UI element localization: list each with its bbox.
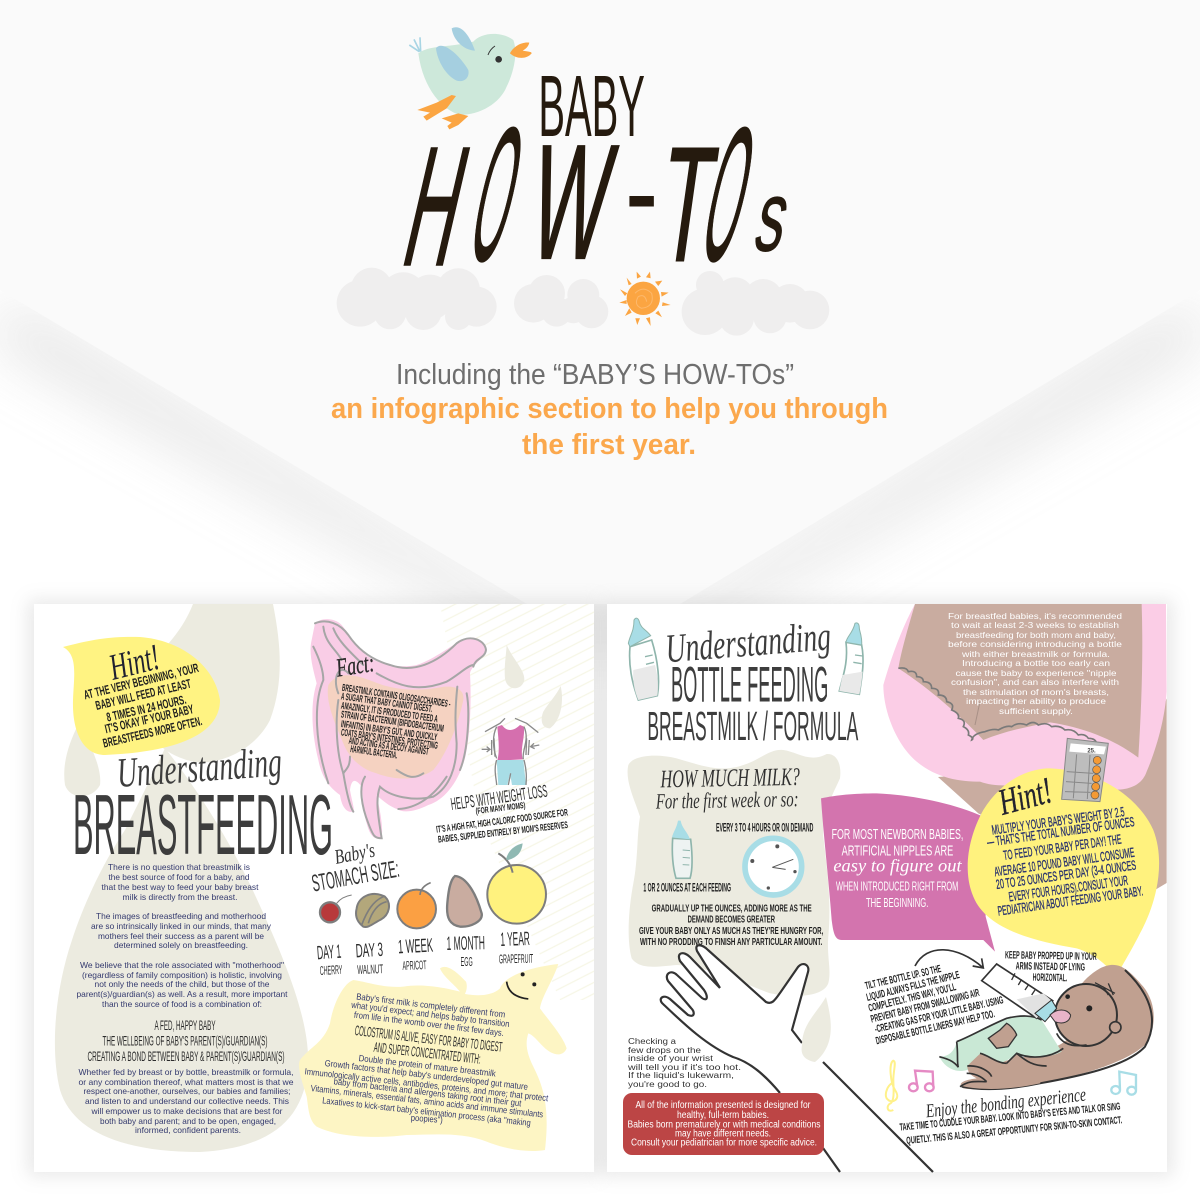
text block: checking a few drops: Checking a [628, 1037, 677, 1046]
text block: keep baby propped: KEEP BABY PROPPED UP IN YOUR [1005, 949, 1097, 963]
text block: breastfeeding intro: determined solely on breastfeeding. [114, 940, 248, 950]
heading: stomach size [310, 840, 401, 898]
text block: breastfeeding intro: mothers feel their success as a parent will be [98, 931, 264, 941]
heading: stomach size: Baby's [333, 840, 377, 869]
callout: colostrum blob: from life in the womb over the first few days. [353, 1010, 504, 1038]
text block: breastfed babies advice: impacting her ability to produce [966, 697, 1107, 706]
text block: helps with weight loss: IT'S A HIGH FAT, HIGH CALORIC FOOD SOURCE FOR [436, 807, 569, 836]
icon: egg [447, 876, 482, 927]
title: T [650, 112, 726, 295]
title: H [390, 112, 484, 301]
heading: understanding breastfeeding [73, 740, 333, 873]
illustration: colon with fact: STRAIN OF BACTERIUM (BIFIDOBACTERIUM [340, 709, 444, 735]
title: O [456, 88, 540, 300]
illustration: feeding baby [939, 964, 1154, 1090]
icon: apricot [397, 883, 436, 928]
icon: grapefruit [487, 843, 546, 924]
title: BABY [538, 57, 645, 155]
callout: right hint bubble [968, 768, 1159, 980]
callout: colostrum blob [299, 964, 567, 1151]
panel: understanding bottle feeding: BREASTMILK / FORMULA [647, 703, 859, 749]
illustration: colon with fact: Fact: [333, 648, 376, 683]
panel: understanding bottle feeding [607, 604, 1167, 1172]
icon: milk drops [505, 645, 562, 728]
illustration: clouds [337, 268, 829, 336]
callout: left hint bubble [63, 637, 220, 755]
icon: walnut [356, 894, 389, 927]
labels: stomach stages: 1 WEEK [397, 936, 434, 958]
callout: left hint bubble: 8 TIMES IN 24 HOURS. [105, 693, 188, 725]
text block: breastfeeding closing: and listen to and understand our collective needs. This [85, 1096, 289, 1106]
illustration: colon with fact [311, 619, 486, 839]
illustration: colon with fact: A SUGAR THAT BABY CANNOT DIGEST. [340, 691, 433, 715]
illustration: colon with fact: COATS BABY'S INTESTINES, PROTECTING [340, 727, 439, 752]
callout: artificial nipples: FOR MOST NEWBORN BABIES, [832, 827, 963, 843]
panel: understanding bottle feeding: BOTTLE FEEDING [671, 657, 828, 713]
text block: breastfed babies advice: cause the baby to experience "nipple [956, 669, 1117, 678]
text block: checking a few drops: you're good to go. [628, 1080, 707, 1089]
text block: breastfeeding intro: are so intrinsically linked in our minds, that many [91, 921, 272, 931]
illustration: hand and wrist [661, 945, 935, 1172]
text block: breastfeeding closing: both baby and parent; and to be open, engaged, [100, 1116, 276, 1126]
callout: left hint bubble: BREASTFEEDS MORE OFTEN. [102, 714, 203, 751]
labels: stomach stages: 1 MONTH [446, 933, 485, 955]
text block: breastfed babies advice: the stimulation of mom's breasts, [963, 688, 1109, 697]
text block: breastfed babies advice: with either breastmilk or formula. [961, 650, 1110, 659]
text block: tilt the bottle: -CREATING GAS FOR YOUR LITTLE BABY. USING [874, 994, 1005, 1036]
text block: breastfeeding intro: the best source of food for a baby, and [108, 872, 250, 882]
text block: helps with weight loss: HELPS WITH WEIGHT LOSS [449, 781, 549, 814]
callout: artificial nipples [821, 793, 995, 952]
text block: helps with weight loss: (FOR MANY MOMS) [475, 800, 526, 816]
panel: how much milk: DEMAND BECOMES GREATER [688, 915, 775, 926]
icon: treble clef [886, 1061, 897, 1111]
illustration: breast and body [883, 604, 1167, 895]
heading: understanding breastfeeding: Understanding [115, 740, 283, 797]
panel: how much milk: EVERY 3 TO 4 HOURS OR ON DEMAND [716, 821, 813, 835]
chart: baby's stomach size: GRAPEFRUIT [499, 952, 533, 966]
chart: baby's stomach size: 1 YEAR [500, 929, 530, 951]
text block: breastfed babies advice: For breastfed babies, it's recommended [948, 612, 1122, 621]
callout: medical disclaimer [623, 1093, 824, 1155]
text block: breastfeeding intro: We believe that the role associated with "motherhood" [80, 960, 284, 970]
heading: understanding bottle feeding [647, 613, 859, 749]
text block: checking a few drops: inside of your wrist [628, 1054, 714, 1063]
chart: baby's stomach size [310, 840, 546, 978]
text block: tilt the bottle: PREVENT BABY FROM SWALLOWING AIR [869, 987, 981, 1026]
labels: stomach stages: DAY 3 [355, 940, 384, 962]
text block: tilt the bottle [864, 963, 1005, 1047]
icon: sun [619, 272, 671, 326]
illustration: colon with fact: AMAZINGLY, IT IS PRODUCED TO FEED A [340, 701, 438, 725]
subtitle: an infographic section to help you through [331, 393, 888, 425]
callout: colostrum blob: Growth factors that help baby's underdeveloped gut mature [324, 1058, 529, 1092]
callout: colostrum blob: Double the protein of mature breastmilk [358, 1053, 497, 1079]
panel: how much milk: HOW MUCH MILK? [660, 763, 800, 793]
text block: breastfed babies advice: Introducing a bottle too early can [962, 659, 1110, 668]
panel: understanding breastfeeding [34, 604, 594, 1172]
callout: left hint bubble: BABY WILL FEED AT LEAST [94, 677, 193, 713]
callout: medical disclaimer: Consult your pediatrician for more specific advice. [631, 1138, 817, 1148]
text block: tilt the bottle: DISPOSABLE BOTTLE LINERS MAY HELP TOO. [875, 1008, 996, 1047]
text block: breastfed babies advice: breastfeeding for both mom and baby, [956, 631, 1116, 640]
labels: stomach stages: DAY 1 [316, 942, 342, 964]
text block: breastfeeding intro: that the best way to feed your baby breast [102, 882, 259, 892]
text block: breastfeeding closing: respect one-another, ourselves, our babies and families; [84, 1086, 290, 1096]
icon: baby bottle right [839, 623, 863, 694]
illustration: colon with fact: HARMFUL BACTERIA. [350, 744, 398, 762]
text block: breastfed babies advice: before considering introducing a bottle [948, 640, 1123, 649]
text block: keep baby propped: ARMS INSTEAD OF LYING [1016, 960, 1085, 974]
icon: blue music notes [1111, 1072, 1136, 1095]
callout: left hint bubble: Hint! [105, 637, 164, 689]
icon: calculator [1062, 738, 1108, 802]
callout: medical disclaimer: healthy, full-term babies. [677, 1110, 769, 1121]
icon: clock [745, 838, 802, 895]
icon: pink music notes [909, 1071, 934, 1091]
illustration: colon with fact: BREASTMILK CONTAINS OLIGOSACCHARIDES - [341, 683, 451, 710]
text block: breastfeeding intro: There is no question that breastmilk is [108, 862, 250, 872]
title: W [519, 110, 625, 293]
heading: understanding bottle feeding: Understanding [664, 613, 833, 671]
icon: woman waist [482, 718, 539, 785]
text block: breastfeeding intro: (regardless of family composition) is holistic, involving [82, 970, 282, 980]
subtitle [331, 359, 888, 461]
text block: breastfeeding closing: or any combination thereof, what matters most is that we [78, 1077, 294, 1087]
text block: checking a few drops: few drops on the [628, 1046, 702, 1055]
icon: baby bottle left [628, 618, 659, 700]
callout: colostrum blob: Baby's first milk is completely different from [356, 991, 506, 1020]
text block: bonding experience [899, 1085, 1123, 1147]
text block: tilt the bottle: TILT THE BOTTLE UP. SO THE [864, 963, 942, 992]
callout: colostrum blob: COLOSTRUM IS ALIVE, EASY FOR BABY TO DIGEST [354, 1022, 503, 1055]
callout: colostrum blob: Immunologically active cells, antibodies, proteins, and more; that protect [304, 1066, 549, 1103]
labels: stomach stages: EGG [461, 955, 473, 969]
title [390, 57, 799, 301]
text block: tilt the bottle: LIQUID ALWAYS FILLS THE NIPPLE [865, 969, 961, 1004]
icon: small bottle [672, 821, 692, 878]
callout: artificial nipples: easy to figure out [833, 856, 963, 876]
labels: stomach stages [316, 929, 533, 978]
title: s [747, 161, 799, 272]
arrow: tilt the bottle [915, 950, 983, 968]
text block: helps with weight loss [436, 781, 569, 846]
text block: keep baby propped [1005, 949, 1097, 984]
text block: breastfeeding intro [76, 862, 288, 1009]
text block: breastfed babies advice [948, 612, 1123, 716]
callout: artificial nipples: ARTIFICIAL NIPPLES ARE [842, 843, 953, 859]
text block: fed happy baby list: A FED, HAPPY BABY [154, 1017, 216, 1033]
callout: colostrum blob: what you'd expect; and helps baby to transition [350, 1000, 510, 1029]
callout: colostrum blob: poopies") [411, 1113, 443, 1125]
text block: breastfeeding intro: parent(s)/guardian(s) as well. As a result, more important [76, 989, 288, 999]
panel: understanding breastfeeding: CREATING A BOND BETWEEN BABY & PARENT(S)/GUARDIAN(S) [88, 1048, 284, 1064]
callout: left hint bubble: AT THE VERY BEGINNING, YOUR [82, 661, 200, 702]
panel: understanding breastfeeding: THE WELLBEING OF BABY'S PARENT(S)/GUARDIAN(S) [102, 1032, 268, 1048]
callout: medical disclaimer: may have different needs. [675, 1128, 771, 1140]
subtitle: Including the “BABY’S HOW-TOs” [396, 359, 794, 391]
text block: breastfeeding closing: Whether fed by breast or by bottle, breastmilk or formula, [78, 1067, 294, 1077]
callout: colostrum blob: Vitamins, minerals, essential fats, amino acids and immune stimulants [310, 1083, 544, 1119]
text block: helps with weight loss: BABIES, SUPPLIED ENTIRELY BY MOM'S RESERVES [437, 820, 569, 846]
text block: breastfeeding intro: than the source of food is a combination of: [102, 999, 262, 1009]
callout: artificial nipples: THE BEGINNING. [866, 896, 928, 910]
illustration: colon with fact: AND ACTING AS A DECOY AGAINST [348, 736, 429, 758]
text block: tilt the bottle: COMPLETELY. THIS WAY, YOU'LL [867, 981, 958, 1015]
labels: stomach stages: WALNUT [357, 962, 384, 977]
chart: baby's stomach size: STOMACH SIZE: [310, 856, 401, 898]
labels: stomach stages: APRICOT [402, 958, 427, 973]
callout: colostrum blob: Laxatives to kick-start baby's elimination process (aka "making [322, 1095, 531, 1128]
text block: breastfed babies advice: to wait at least 2-3 weeks to establish [951, 621, 1119, 630]
text block: keep baby propped: HORIZONTAL. [1033, 972, 1067, 984]
text block: checking a few drops: will tell you if it's too hot. [627, 1063, 741, 1072]
text block: breastfeeding closing: will empower us to make decisions that are best for [90, 1106, 283, 1116]
panel: how much milk: For the first week or so: [655, 786, 799, 814]
panel: how much milk: WITH NO PRODDING TO FINISH ANY PARTICULAR AMOUNT. [640, 937, 822, 948]
panel: understanding breastfeeding: BREASTFEEDING [73, 778, 333, 873]
panel: how much milk: GRADUALLY UP THE OUNCES, ADDING MORE AS THE [652, 904, 812, 915]
text block: breastfeeding intro: not only the needs of the child, but those of the [94, 979, 270, 989]
callout: right hint bubble: Hint! [994, 770, 1056, 824]
text block: bonding experience: Enjoy the bonding experience [924, 1085, 1087, 1122]
text block: checking a few drops: If the liquid's lukewarm, [628, 1071, 734, 1080]
callout: artificial nipples: WHEN INTRODUCED RIGHT FROM [836, 880, 958, 894]
panel: how much milk [628, 750, 840, 996]
text block: breastfeeding intro: milk is directly from the breast. [122, 892, 238, 902]
panel: how much milk: 1 OR 2 OUNCES AT EACH FEEDING [643, 881, 731, 895]
callout: left hint bubble: IT'S OKAY IF YOUR BABY [104, 702, 195, 736]
callout: medical disclaimer: Babies born prematurely or with medical conditions [628, 1120, 820, 1130]
icon: cherry [320, 895, 352, 922]
icon: calculator: 25. [1087, 748, 1096, 754]
subtitle: the first year. [522, 429, 696, 461]
callout: medical disclaimer: All of the information presented is designed for [636, 1100, 811, 1111]
text block: breastfeeding intro: The images of breastfeeding and motherhood [96, 911, 266, 921]
title: - [625, 117, 658, 266]
text block: fed happy baby list [88, 1017, 284, 1064]
text block: breastfeeding closing [78, 1067, 294, 1135]
labels: stomach stages: CHERRY [319, 963, 343, 978]
illustration: colon with fact: INFANTIS) IN BABY'S GUT, AND QUICKLY [340, 719, 438, 743]
text block: breastfed babies advice: confusion", and can also interfere with [951, 678, 1119, 687]
text block: breastfeeding closing: informed, confident parents. [135, 1125, 241, 1135]
panel: how much milk: GIVE YOUR BABY ONLY AS MUCH AS THEY'RE HUNGRY FOR, [639, 926, 823, 937]
title: O [687, 88, 771, 300]
text block: breastfed babies advice: sufficient supply. [999, 707, 1073, 716]
callout: colostrum blob: baby from bacteria and allergens taking root in their gut [333, 1076, 522, 1108]
illustration: flying bird [409, 27, 532, 129]
callout: colostrum blob: AND SUPER CONCENTRATED WITH: [373, 1039, 481, 1067]
text block: checking a few drops [627, 1037, 741, 1089]
